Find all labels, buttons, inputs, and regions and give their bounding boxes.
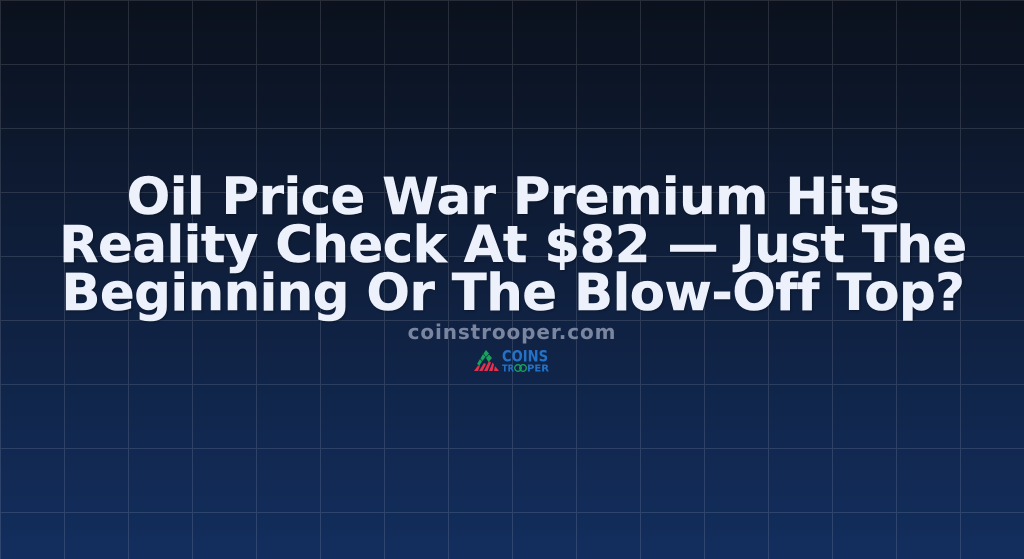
website text: coinstrooper.com <box>408 320 616 344</box>
title: Oil Price War Premium Hits <box>127 168 899 227</box>
icon: logo mountain <box>474 350 499 371</box>
logo wordmark: TR <box>502 364 514 374</box>
logo wordmark: PER <box>527 364 549 374</box>
title: Beginning Or The Blow-Off Top? <box>61 264 965 323</box>
title <box>59 168 967 323</box>
logo wordmark <box>502 346 549 374</box>
logo <box>474 347 549 374</box>
title: Reality Check At $82 — Just The <box>59 216 967 275</box>
